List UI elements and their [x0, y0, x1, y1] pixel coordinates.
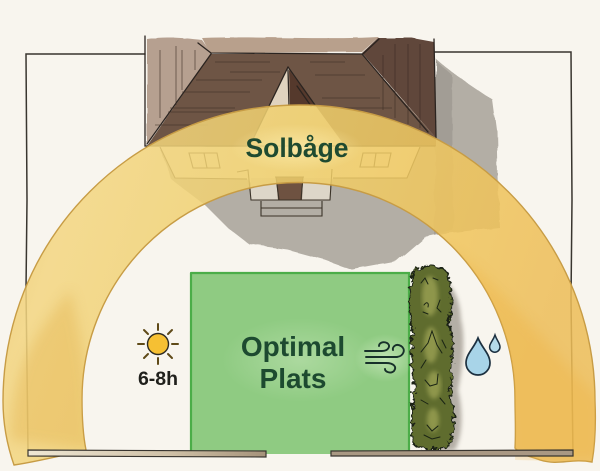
door — [276, 177, 303, 200]
house shadow on the ground — [160, 58, 500, 270]
icon: small water drop — [490, 335, 500, 352]
green optimal plot — [191, 273, 415, 454]
hedge leaf marks — [421, 278, 446, 439]
label: Solbåge: Solbåge — [245, 133, 349, 163]
roof details and lines — [145, 36, 436, 172]
hedge — [410, 266, 454, 450]
house walls — [160, 147, 420, 183]
sun arch band — [3, 105, 595, 465]
roof: left side panel — [147, 37, 212, 144]
label: Optimal Plats: Plats — [260, 363, 326, 394]
roof: gable valley — [289, 70, 315, 105]
house — [145, 36, 436, 216]
roof: top ridge panel — [202, 37, 379, 53]
porch wall — [251, 178, 330, 200]
arch extra watercolor wash — [10, 245, 600, 460]
hedge highlights — [422, 276, 441, 432]
roof: right side panel — [362, 38, 436, 138]
icon: wind — [365, 342, 404, 372]
label glow: Solbåge — [231, 124, 363, 172]
fence bottom: right rail — [331, 450, 573, 456]
roof: central gable — [236, 67, 345, 172]
label: Optimal Plats: Optimal — [241, 331, 345, 362]
label: Optimal Plats — [241, 331, 345, 394]
label: 6-8h: 6-8h — [138, 368, 178, 390]
garden fence outline — [26, 52, 573, 456]
fence bottom: left rail — [28, 450, 266, 457]
hedge body — [410, 266, 454, 450]
wall outlines, windows and steps — [160, 147, 420, 216]
icon: large water drop — [466, 338, 490, 375]
hedge shadow — [430, 280, 463, 452]
icon: sun — [138, 324, 178, 364]
roof: main slopes — [147, 54, 436, 146]
